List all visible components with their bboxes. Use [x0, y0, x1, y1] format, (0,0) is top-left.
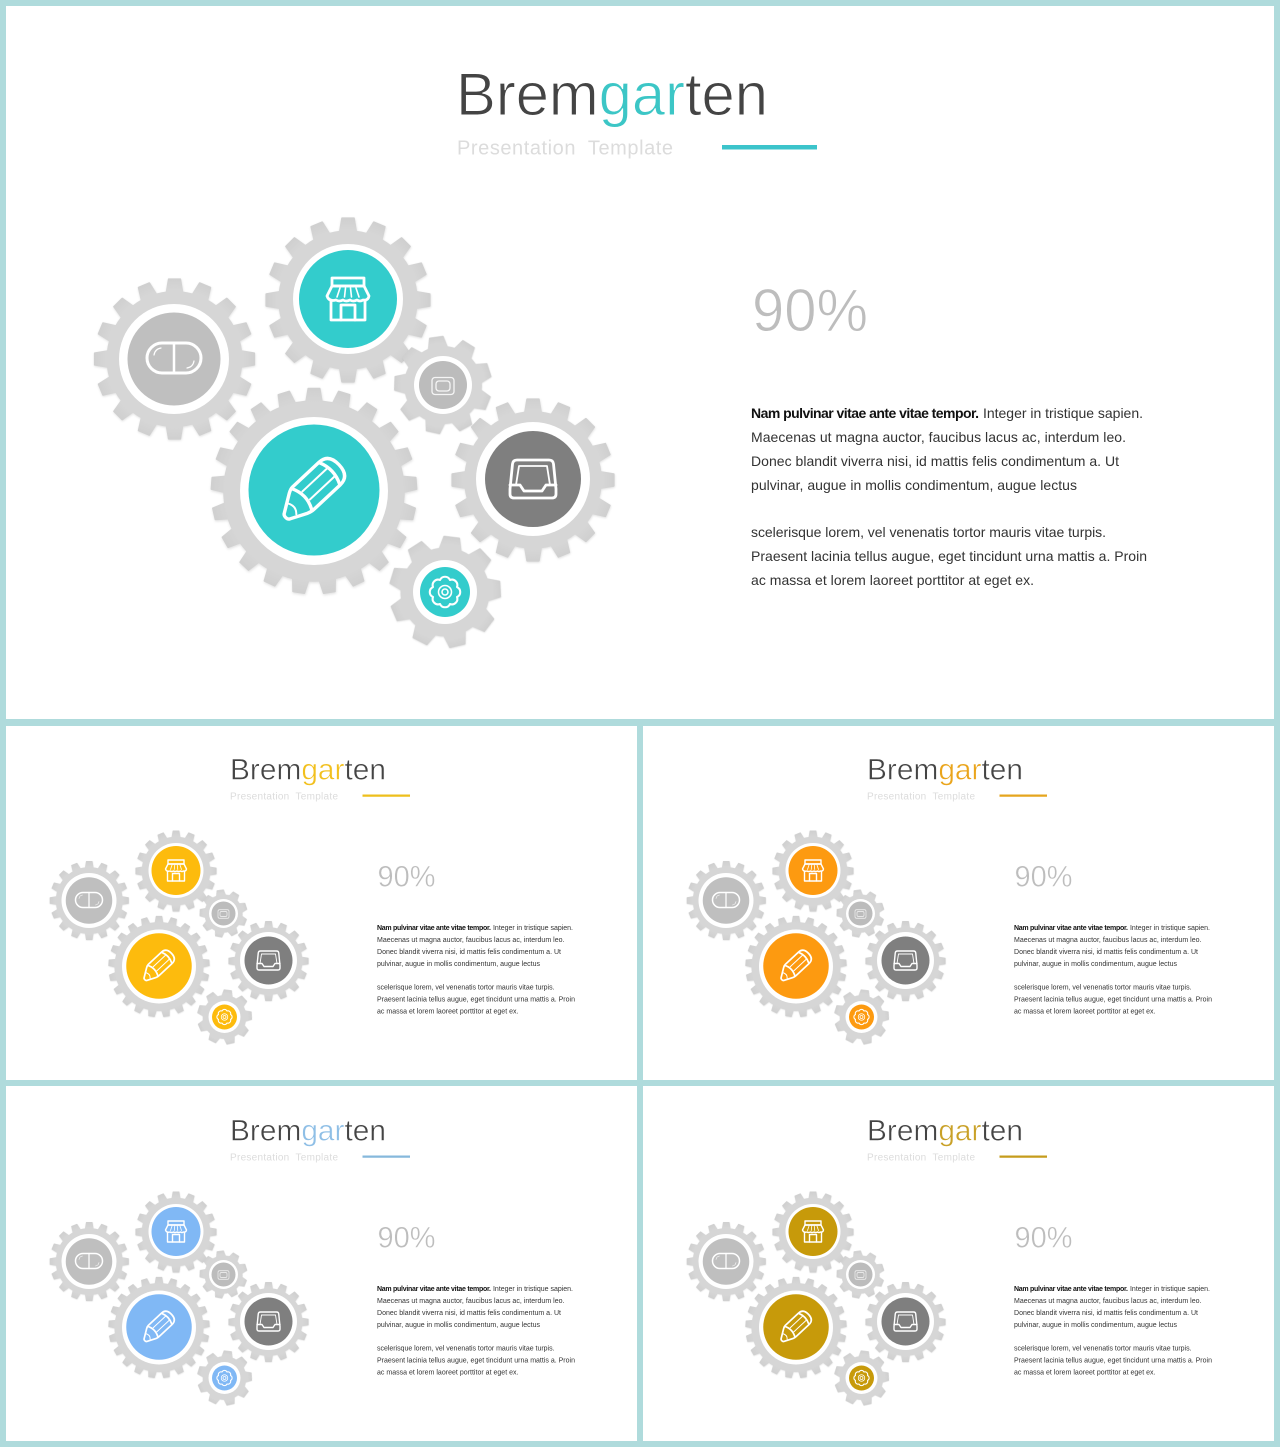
gear: pencil	[109, 916, 209, 1017]
body text: Maecenas ut magna auctor, faucibus lacus ac, interdum leo.	[377, 937, 565, 944]
gear: tv	[388, 331, 498, 440]
gear: cog	[194, 1348, 255, 1408]
gear: store	[136, 1192, 216, 1272]
slide: orange	[643, 726, 1274, 1080]
subtitle: Presentation Template	[230, 1152, 338, 1163]
body text: Donec blandit viverra nisi, id mattis felis condimentum a. Ut	[751, 453, 1119, 469]
gear: pencil	[109, 1277, 209, 1378]
gear: store	[773, 1192, 853, 1272]
title: Bremgarten	[867, 1114, 1023, 1148]
body text: scelerisque lorem, vel venenatis tortor mauris vitae turpis.	[377, 1346, 555, 1352]
gear: cog	[383, 531, 507, 654]
body text: Nam pulvinar vitae ante vitae tempor.	[751, 405, 979, 421]
gear: inbox	[229, 921, 308, 1001]
body text: Nam pulvinar vitae ante vitae tempor.	[377, 925, 491, 932]
body text: pulvinar, augue in mollis condimentum, augue lectus	[377, 1322, 540, 1329]
gear: cog	[194, 987, 255, 1047]
gear: pencil	[746, 1277, 846, 1378]
title: Bremgarten	[456, 61, 768, 128]
body text: Nam pulvinar vitae ante vitae tempor.	[1014, 925, 1128, 932]
accent bar	[362, 1156, 410, 1158]
body text: Praesent lacinia tellus augue, eget tincidunt urna mattis a. Proin	[1014, 1358, 1212, 1364]
percentage: 90%	[378, 1222, 436, 1254]
body text: pulvinar, augue in mollis condimentum, augue lectus	[1014, 1322, 1178, 1329]
slide: blue	[6, 1086, 637, 1441]
gear: tv	[197, 1248, 251, 1301]
gear: store	[773, 831, 853, 911]
subtitle: Presentation Template	[867, 791, 975, 802]
percentage: 90%	[378, 860, 436, 894]
body text	[377, 1286, 575, 1376]
gear: cog	[831, 1348, 892, 1408]
title: Bremgarten	[230, 1114, 386, 1148]
body text	[1014, 1286, 1212, 1376]
body text: Integer in tristique sapien.	[493, 1286, 573, 1293]
gear: inbox	[866, 1282, 945, 1362]
gear: store	[136, 831, 216, 911]
percentage: 90%	[1014, 860, 1072, 894]
body text: Praesent lacinia tellus augue, eget tincidunt urna mattis a. Proin	[1014, 996, 1212, 1004]
body text: Maecenas ut magna auctor, faucibus lacus ac, interdum leo.	[1014, 937, 1202, 944]
body text: ac massa et lorem laoreet porttitor at eget ex.	[751, 572, 1034, 588]
body text: Maecenas ut magna auctor, faucibus lacus ac, interdum leo.	[377, 1298, 565, 1305]
gear: tv	[834, 887, 888, 940]
body text: Integer in tristique sapien.	[493, 925, 573, 932]
gear: inbox	[452, 399, 614, 561]
subtitle: Presentation Template	[867, 1152, 975, 1163]
body text: ac massa et lorem laoreet porttitor at eget ex.	[377, 1370, 519, 1376]
accent bar	[362, 794, 410, 797]
body text: ac massa et lorem laoreet porttitor at eget ex.	[1014, 1370, 1156, 1376]
body text: Integer in tristique sapien.	[1130, 1286, 1210, 1293]
body text: Donec blandit viverra nisi, id mattis felis condimentum a. Ut	[377, 949, 561, 956]
body text: scelerisque lorem, vel venenatis tortor mauris vitae turpis.	[377, 984, 555, 992]
body text: Nam pulvinar vitae ante vitae tempor.	[377, 1286, 491, 1293]
body text: scelerisque lorem, vel venenatis tortor mauris vitae turpis.	[751, 524, 1106, 540]
subtitle: Presentation Template	[230, 791, 338, 802]
title: Bremgarten	[230, 754, 386, 786]
gear: pill	[95, 279, 254, 439]
gear: inbox	[866, 921, 945, 1001]
body text: Donec blandit viverra nisi, id mattis felis condimentum a. Ut	[1014, 1310, 1198, 1317]
gear: pill	[687, 1222, 765, 1301]
body text: ac massa et lorem laoreet porttitor at eget ex.	[377, 1008, 519, 1016]
body text: pulvinar, augue in mollis condimentum, augue lectus	[377, 961, 540, 968]
body text: scelerisque lorem, vel venenatis tortor mauris vitae turpis.	[1014, 984, 1192, 992]
gear: pencil	[746, 916, 846, 1017]
slide: large teal	[6, 6, 1274, 719]
body text: ac massa et lorem laoreet porttitor at eget ex.	[1014, 1008, 1156, 1016]
accent bar	[1000, 794, 1047, 797]
body text	[751, 405, 1147, 588]
body text: Praesent lacinia tellus augue, eget tincidunt urna mattis a. Proin	[377, 996, 575, 1004]
body text: Integer in tristique sapien.	[983, 405, 1143, 421]
body text: pulvinar, augue in mollis condimentum, augue lectus	[751, 477, 1077, 493]
body text	[1014, 925, 1212, 1016]
body text: scelerisque lorem, vel venenatis tortor mauris vitae turpis.	[1014, 1346, 1192, 1352]
subtitle: Presentation Template	[457, 138, 673, 160]
body text: Maecenas ut magna auctor, faucibus lacus ac, interdum leo.	[1014, 1298, 1202, 1305]
body text: pulvinar, augue in mollis condimentum, augue lectus	[1014, 961, 1178, 968]
gear: pill	[50, 1222, 128, 1301]
gear: pill	[50, 861, 128, 940]
body text: Praesent lacinia tellus augue, eget tincidunt urna mattis a. Proin	[751, 548, 1147, 564]
percentage: 90%	[752, 277, 868, 344]
percentage: 90%	[1014, 1222, 1072, 1254]
body text: Maecenas ut magna auctor, faucibus lacus ac, interdum leo.	[751, 429, 1126, 445]
slide: gold	[643, 1086, 1274, 1441]
gear: store	[266, 218, 430, 382]
title: Bremgarten	[867, 754, 1023, 786]
gear: cog	[831, 987, 892, 1047]
body text: Nam pulvinar vitae ante vitae tempor.	[1014, 1286, 1128, 1293]
body text: Donec blandit viverra nisi, id mattis felis condimentum a. Ut	[1014, 949, 1198, 956]
gear: pill	[687, 861, 765, 940]
gear: tv	[197, 887, 251, 940]
body text: Donec blandit viverra nisi, id mattis felis condimentum a. Ut	[377, 1310, 561, 1317]
body text	[377, 925, 575, 1016]
accent bar	[1000, 1156, 1047, 1158]
gear: pencil	[211, 389, 417, 594]
gear: tv	[834, 1248, 888, 1301]
accent bar	[722, 145, 817, 150]
body text: Praesent lacinia tellus augue, eget tincidunt urna mattis a. Proin	[377, 1358, 575, 1364]
gear: inbox	[229, 1282, 308, 1362]
slide: yellow	[6, 726, 637, 1080]
body text: Integer in tristique sapien.	[1130, 925, 1210, 932]
